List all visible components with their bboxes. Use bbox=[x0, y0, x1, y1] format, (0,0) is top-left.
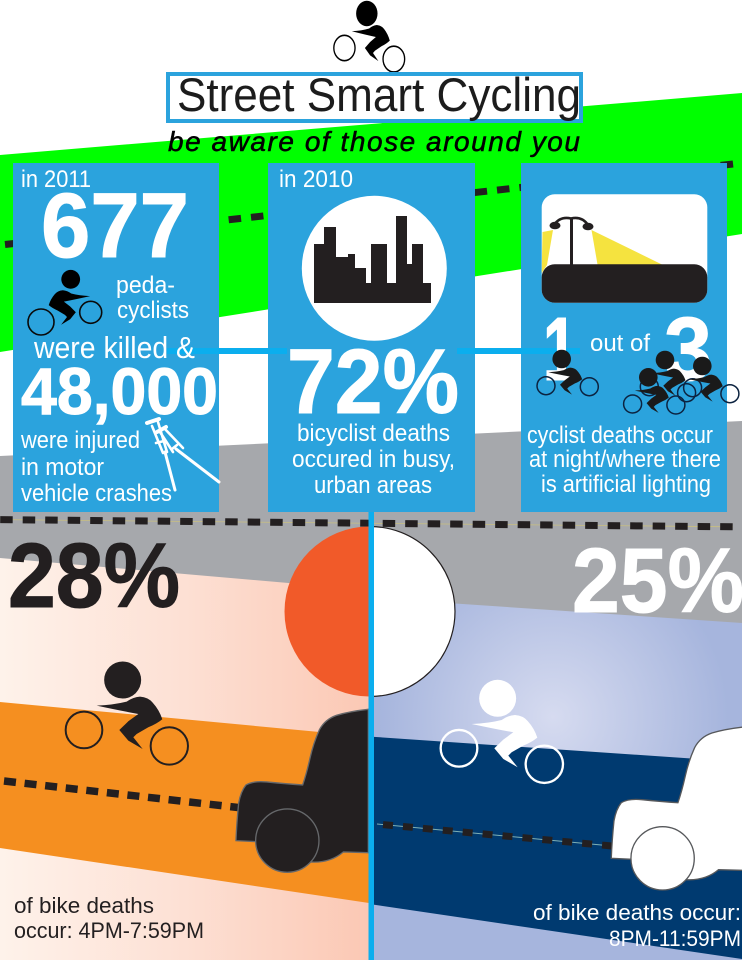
road dashes bbox=[377, 824, 612, 846]
evening caption bbox=[14, 897, 202, 938]
panel: night deaths bbox=[457, 163, 739, 512]
icon: crutches bbox=[147, 419, 219, 490]
panel: 2011 stats bbox=[13, 163, 219, 512]
panel: night bbox=[374, 526, 742, 960]
orange road bbox=[0, 702, 369, 903]
year label: in 2010 bbox=[279, 166, 353, 193]
night text: at night/where there bbox=[529, 446, 721, 473]
icon: three cyclists bbox=[624, 351, 739, 414]
road dashes bbox=[4, 781, 238, 808]
car bbox=[236, 709, 368, 872]
icon: one cyclist bbox=[537, 350, 598, 396]
injured text bbox=[20, 427, 172, 507]
title: Street Smart Cycling bbox=[177, 68, 581, 121]
injured text: vehicle crashes bbox=[21, 480, 172, 507]
urban text: bicyclist deaths bbox=[297, 420, 450, 447]
out of: out of bbox=[590, 330, 650, 357]
evening caption: of bike deaths bbox=[14, 893, 154, 918]
panel: sunset bbox=[0, 526, 368, 960]
label: pedacyclists: peda- bbox=[116, 272, 175, 299]
number 677: 677 bbox=[41, 175, 189, 277]
label: pedacyclists bbox=[116, 272, 189, 324]
night text: is artificial lighting bbox=[541, 471, 711, 498]
night text bbox=[527, 422, 721, 498]
car bbox=[611, 727, 742, 890]
number 1: 1 bbox=[543, 300, 577, 400]
sun bbox=[284, 526, 368, 696]
subtitle: be aware of those around you bbox=[168, 126, 580, 157]
number 72%: 72% bbox=[287, 331, 459, 433]
title cyclist icon bbox=[334, 1, 405, 72]
urban text: occured in busy, bbox=[292, 446, 455, 473]
vertical divider bbox=[368, 512, 374, 960]
year label: in 2011 bbox=[21, 166, 91, 193]
injured text: were injured bbox=[20, 427, 140, 454]
injured text: in motor bbox=[21, 454, 104, 481]
icon: city skyline bbox=[302, 196, 447, 341]
title box bbox=[168, 68, 581, 121]
navy road bbox=[369, 736, 742, 959]
panel: 2010 urban deaths bbox=[219, 163, 475, 512]
number 48,000: 48,000 bbox=[21, 354, 218, 428]
road dashes across panels bbox=[0, 520, 733, 527]
grey road band bbox=[0, 421, 742, 960]
were killed: were killed & bbox=[33, 330, 195, 365]
icon: street lamp bbox=[542, 194, 707, 303]
green road band bbox=[0, 93, 742, 352]
urban text: urban areas bbox=[314, 472, 432, 499]
night text: cyclist deaths occur bbox=[527, 422, 713, 449]
evening caption: occur: 4PM-7:59PM bbox=[14, 918, 204, 943]
night caption bbox=[534, 904, 740, 946]
cyclist bbox=[441, 680, 563, 783]
number 3: 3 bbox=[664, 300, 712, 400]
moon bbox=[374, 526, 456, 697]
night caption: of bike deaths occur: bbox=[533, 900, 741, 925]
urban text bbox=[292, 420, 455, 499]
cyclist bbox=[66, 661, 188, 765]
road dashes on green bbox=[5, 163, 742, 244]
icon: cyclist bbox=[28, 270, 102, 335]
number 28%: 28% bbox=[8, 525, 180, 627]
label: pedacyclists: cyclists bbox=[117, 297, 189, 324]
